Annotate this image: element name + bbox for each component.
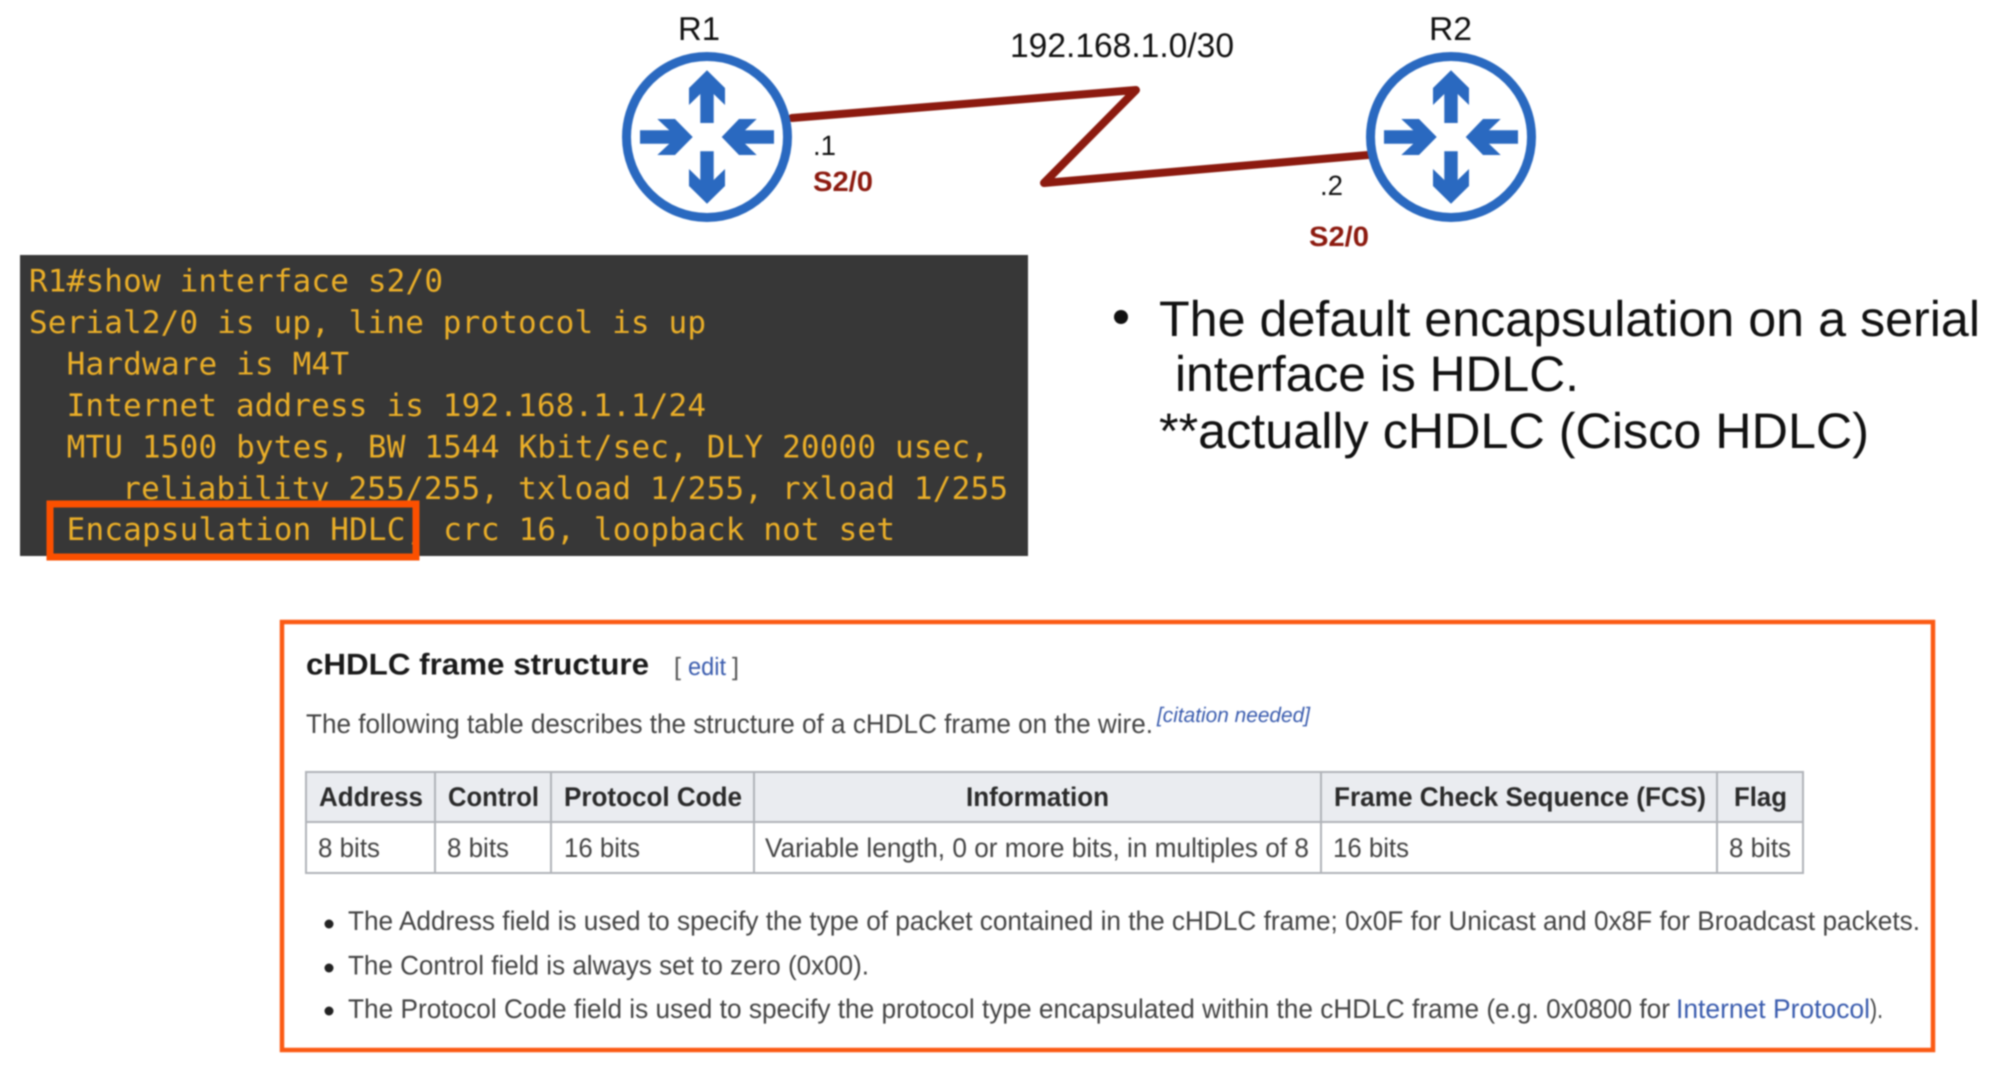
panel: terminal output: Hardware is M4T xyxy=(29,346,349,382)
edit link xyxy=(674,653,739,681)
icon: router R2 xyxy=(1370,56,1532,218)
panel: terminal output: Encapsulation HDLC, crc 16, loopback not set xyxy=(29,512,895,548)
label: R2 host address: .2 xyxy=(1320,170,1343,201)
table: frame fields: Address xyxy=(319,782,423,812)
field notes list: The Protocol Code field is used to specify the protocol type encapsulated within the cHDLC frame (e.g. 0x0800 for xyxy=(348,994,1670,1024)
field notes list: The Control field is always set to zero (0x00). xyxy=(348,950,869,980)
panel: terminal output xyxy=(20,255,1028,556)
table: frame fields: Information xyxy=(966,782,1109,812)
highlight box: encapsulation xyxy=(50,504,416,557)
label: R1: R1 xyxy=(678,10,720,47)
label: R1 interface: S2/0 xyxy=(813,166,873,197)
icon: router R1 xyxy=(626,56,788,218)
field notes list xyxy=(324,906,1920,1024)
label: R2: R2 xyxy=(1429,10,1472,47)
table: frame fields: 16 bits xyxy=(1333,833,1409,863)
table: frame fields: 16 bits xyxy=(564,833,640,863)
table: frame fields: 8 bits xyxy=(447,833,509,863)
table: frame fields: 8 bits xyxy=(1729,833,1791,863)
panel: terminal output: reliability 255/255, txload 1/255, rxload 1/255 xyxy=(28,471,1008,507)
table: frame fields: Variable length, 0 or more bits, in multiples of 8 xyxy=(765,833,1309,863)
label: subnet: 192.168.1.0/30 xyxy=(1010,27,1234,65)
label: R1 host address: .1 xyxy=(813,130,836,161)
table: frame fields: Flag xyxy=(1734,782,1787,812)
table: frame fields: Protocol Code xyxy=(564,782,742,812)
field notes list: Internet Protocol xyxy=(1676,994,1870,1024)
serial link zigzag xyxy=(792,90,1368,183)
field notes list: The Address field is used to specify the type of packet contained in the cHDLC frame; 0x0F for Unicast and 0x8F for Broadcast packets. xyxy=(348,906,1920,936)
panel: terminal output: Internet address is 192.168.1.1/24 xyxy=(29,388,706,424)
intro sentence: The following table describes the structure of a cHDLC frame on the wire. xyxy=(306,709,1153,739)
table: frame fields: Control xyxy=(448,782,539,812)
panel: cHDLC frame structure xyxy=(282,622,1933,1050)
panel: terminal output: Serial2/0 is up, line protocol is up xyxy=(29,305,706,341)
citation: [citation needed] xyxy=(1156,704,1311,727)
table: frame fields xyxy=(306,772,1803,873)
bullet note: **actually cHDLC (Cisco HDLC) xyxy=(1159,403,1869,459)
panel: terminal output: MTU 1500 bytes, BW 1544 Kbit/sec, DLY 20000 usec, xyxy=(29,430,989,466)
table: frame fields: 8 bits xyxy=(318,833,380,863)
heading: cHDLC frame structure xyxy=(306,648,649,682)
edit link: ] xyxy=(732,653,739,681)
bullet note: The default encapsulation on a serial xyxy=(1159,291,1980,347)
table: frame fields: Frame Check Sequence (FCS) xyxy=(1334,782,1706,812)
bullet note: interface is HDLC. xyxy=(1175,346,1579,402)
label: R2 interface: S2/0 xyxy=(1309,221,1369,252)
panel: terminal output: R1#show interface s2/0 xyxy=(29,264,443,300)
bullet note xyxy=(1114,291,1980,459)
edit link: [ xyxy=(674,653,681,681)
field notes list: ). xyxy=(1870,994,1883,1024)
edit link: edit xyxy=(688,653,726,681)
